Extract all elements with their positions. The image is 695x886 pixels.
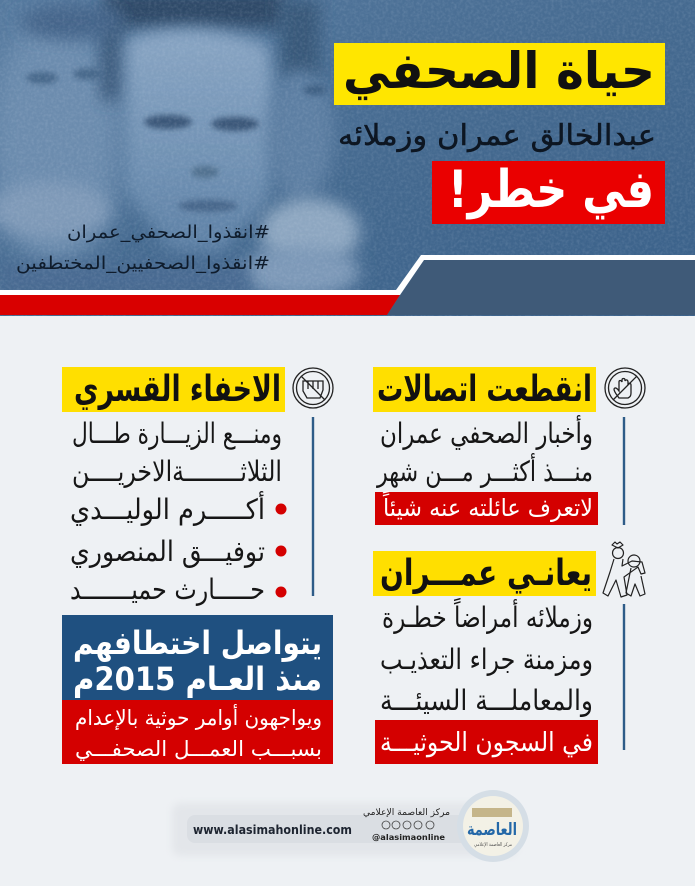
body text: ومزمنة جراء التعذيـب xyxy=(380,643,593,676)
hashtags: #انقذوا_الصحفي_عمران xyxy=(67,222,270,243)
body text xyxy=(72,417,282,488)
logo xyxy=(457,790,529,862)
panel: enforced disappearance xyxy=(62,367,333,764)
heading: انقطعت اتصالات xyxy=(377,369,592,410)
list of names: توفيـــق المنصوري xyxy=(70,535,265,568)
panel: Omran suffers xyxy=(373,542,645,764)
callout: red box xyxy=(62,700,333,764)
body text: وأخبار الصحفي عمران xyxy=(380,414,593,450)
logo: العاصمة xyxy=(467,820,517,840)
header ribbon xyxy=(0,255,695,315)
callout: red note: في السجون الحوثيـــة xyxy=(380,728,593,758)
icon: fist xyxy=(293,368,333,408)
header photo background xyxy=(0,0,695,316)
icon: stop hand xyxy=(605,368,645,408)
body text: وزملائه أمراضاً خطـرة xyxy=(382,597,593,634)
hashtags: #انقذوا_الصحفيين_المختطفين xyxy=(16,253,270,274)
icon: assault figures xyxy=(603,542,645,597)
footer social block xyxy=(363,808,450,842)
callout: blue box: منذ العـام 2015م xyxy=(73,660,322,698)
heading xyxy=(373,367,596,412)
footer brush strip xyxy=(172,803,517,856)
list of names xyxy=(70,490,286,606)
panel: communications cut xyxy=(373,367,645,525)
callout: blue box xyxy=(62,615,333,700)
body text xyxy=(375,414,593,488)
hashtags xyxy=(16,222,270,274)
divider line xyxy=(623,604,625,750)
callout: red note: لاتعرف عائلته عنه شيئاً xyxy=(382,491,593,522)
subtitle: عبدالخالق عمران وزملائه xyxy=(338,118,656,152)
callout: blue box: يتواصل اختطافهم xyxy=(73,624,322,662)
heading xyxy=(62,367,285,412)
body text: الثلاثــــــــةالاخريــــن xyxy=(72,455,282,488)
callout: red note xyxy=(375,720,598,764)
footer website pill: www.alasimahonline.com xyxy=(193,822,352,837)
list of names: حـــــارث حميـــــــد xyxy=(70,573,265,606)
body text xyxy=(380,597,593,717)
list of names: أكـــــرم الوليـــدي xyxy=(70,490,265,526)
footer social block: @alasimaonline xyxy=(372,833,445,842)
divider line xyxy=(623,417,625,525)
logo: مركز العاصمة الإعلامي xyxy=(474,842,512,848)
callout: red box: ويواجهون أوامر حوثية بالإعدام xyxy=(75,704,322,730)
footer social block: مركز العاصمة الإعلامي xyxy=(363,808,450,818)
body text: منـــذ أكثـــر مـــن شهر xyxy=(375,452,593,488)
body text: والمعاملـــة السيئـــة xyxy=(380,684,593,717)
heading: يعانـي عمـــران xyxy=(380,553,592,594)
callout: red box: بسبـــب العمـــل الصحفـــي xyxy=(75,737,322,761)
heading: الاخفاء القسري xyxy=(74,369,281,410)
danger banner: في خطر! xyxy=(448,160,654,220)
body text: ومنـــع الزيـــارة طـــال xyxy=(72,417,282,450)
title: yellow banner: حياة الصحفي xyxy=(343,42,655,100)
footer xyxy=(172,790,529,862)
divider line xyxy=(312,417,314,596)
footer website pill xyxy=(187,815,472,843)
